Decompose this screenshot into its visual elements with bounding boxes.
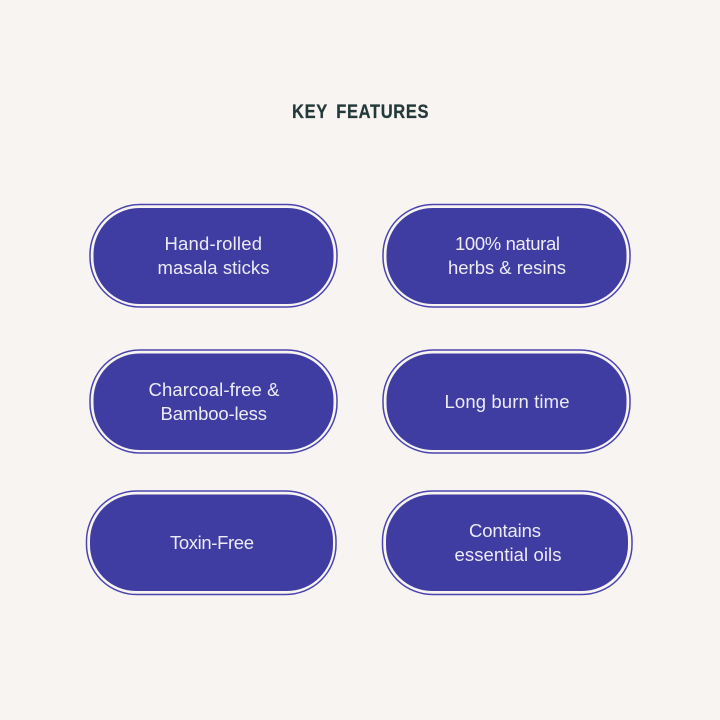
panel: hand-rolled masala sticks: masala sticks	[158, 257, 270, 278]
panel: contains essential oils: essential oils	[454, 544, 562, 565]
panel: contains essential oils	[382, 491, 632, 594]
panel: natural herbs and resins: 100% natural	[455, 233, 560, 254]
panel: toxin-free	[86, 491, 336, 594]
panel: natural herbs and resins	[383, 204, 630, 307]
panel: natural herbs and resins: herbs & resins	[448, 257, 566, 278]
panel: long burn time	[383, 350, 630, 453]
panel: charcoal-free and bamboo-less	[90, 350, 337, 453]
panel: charcoal-free and bamboo-less: Charcoal-free &	[148, 379, 280, 400]
panel: toxin-free: Toxin-Free	[170, 532, 254, 553]
panel: long burn time: Long burn time	[444, 391, 570, 412]
title: KEY FEATURES	[292, 101, 429, 122]
panel: contains essential oils: Contains	[469, 520, 541, 541]
panel: hand-rolled masala sticks: Hand-rolled	[164, 233, 262, 254]
panel: hand-rolled masala sticks	[90, 204, 337, 307]
panel: charcoal-free and bamboo-less: Bamboo-less	[160, 403, 267, 424]
